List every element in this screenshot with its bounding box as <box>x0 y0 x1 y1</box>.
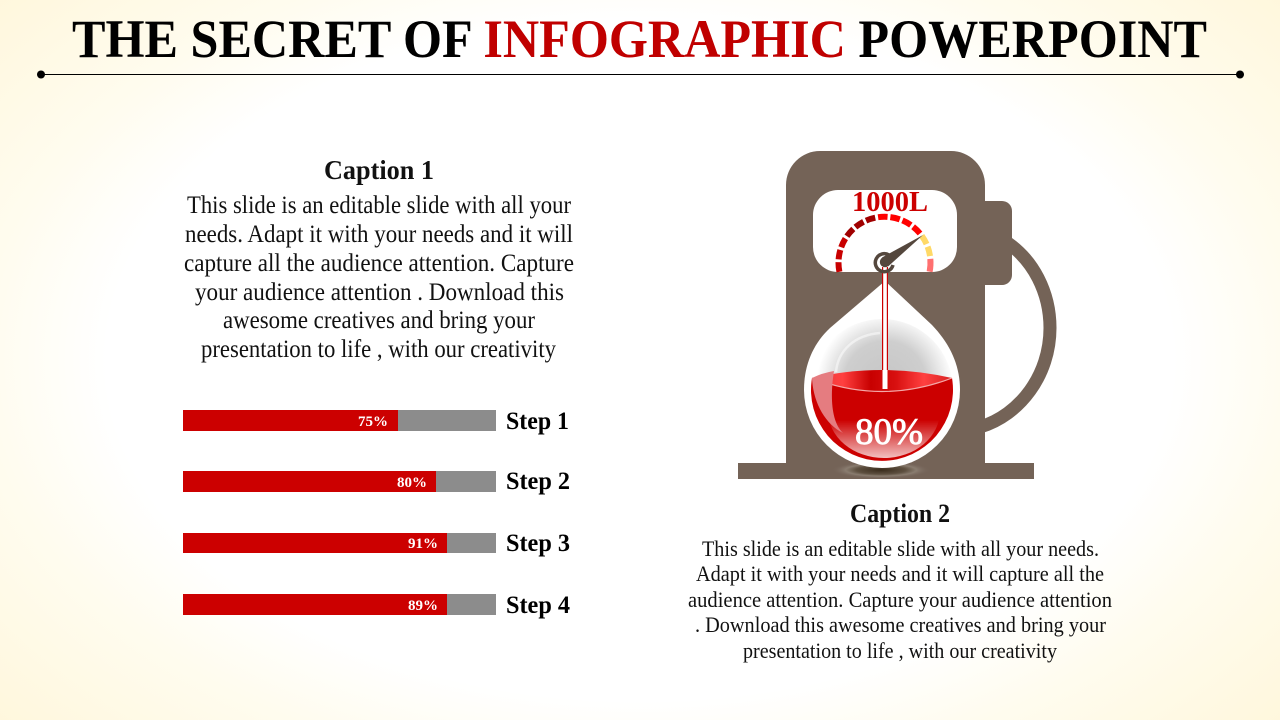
step 4 bar <box>183 592 570 619</box>
glass drop interior <box>811 319 953 461</box>
caption 1 body text: awesome creatives and bring your <box>223 307 536 334</box>
step 1 bar: 75% <box>358 414 388 430</box>
gauge stem <box>882 267 888 389</box>
gauge dial segments <box>838 217 930 272</box>
step 2 bar <box>183 468 570 495</box>
liquid fill <box>811 364 953 461</box>
step 3 bar: 91% <box>408 536 438 552</box>
gauge needle and hub <box>875 235 923 272</box>
caption 2 body text: . Download this awesome creatives and bring your <box>695 612 1106 637</box>
step 4 bar: 89% <box>408 598 438 614</box>
caption 2 body text: Adapt it with your needs and it will capture all the <box>696 561 1104 586</box>
title: THE SECRET OF INFOGRAPHIC POWERPOINT <box>72 8 1207 69</box>
fill level text: 80% <box>855 412 923 453</box>
title rule with end dots <box>37 70 1244 78</box>
drop shadow <box>832 462 930 478</box>
step 3 bar: Step 3 <box>506 530 570 557</box>
step 1 bar: Step 1 <box>506 408 569 435</box>
fuel pump illustration <box>738 151 1050 479</box>
caption 2 body text: This slide is an editable slide with all your needs. <box>702 536 1099 561</box>
caption 1 body text: capture all the audience attention. Capture <box>184 250 574 277</box>
pump hose <box>980 238 1050 427</box>
bar chart: steps <box>183 408 570 619</box>
step 4 bar: Step 4 <box>506 592 570 619</box>
pump body <box>738 151 1034 479</box>
caption 1 body text: needs. Adapt it with your needs and it will <box>185 221 573 248</box>
step 3 bar <box>183 530 570 557</box>
caption 1 body text: your audience attention . Download this <box>195 279 564 306</box>
gauge screen <box>813 190 957 272</box>
caption 1 body text: presentation to life , with our creativity <box>201 336 556 363</box>
gauge label: 1000L <box>852 186 928 218</box>
caption 1 body text <box>184 192 574 363</box>
caption 1 heading: Caption 1 <box>324 155 434 185</box>
drop outline <box>804 281 960 468</box>
step 2 bar: Step 2 <box>506 468 570 495</box>
step 1 bar <box>183 408 569 435</box>
step 2 bar: 80% <box>397 475 427 491</box>
caption 2 body text <box>688 536 1112 663</box>
caption 2 body text: audience attention. Capture your audience attention <box>688 587 1112 612</box>
caption 2 body text: presentation to life , with our creativity <box>743 638 1058 663</box>
caption 2 heading: Caption 2 <box>850 499 950 528</box>
caption 1 body text: This slide is an editable slide with all your <box>187 192 572 219</box>
